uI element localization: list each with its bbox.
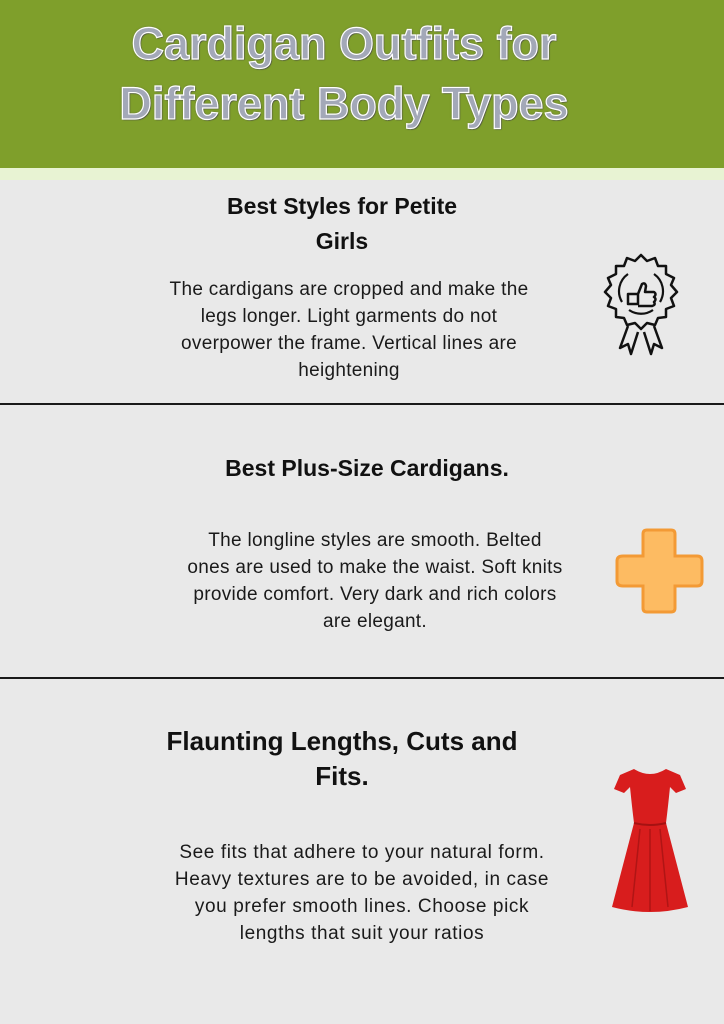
heading: plus-size: Best Plus-Size Cardigans. [225,455,509,481]
text: flaunting: See fits that adhere to your natural form. [179,842,545,863]
header band [0,0,724,168]
text: plus-size: The longline styles are smooth. Belted [208,530,542,551]
text: plus-size: provide comfort. Very dark and rich colors [193,584,557,605]
text: petite: The cardigans are cropped and make the [170,279,528,300]
icon: orange plus [616,528,704,614]
title [119,18,569,130]
icon: award badge [604,254,678,356]
heading: flaunting [166,726,517,791]
text: petite [170,279,528,381]
text: plus-size: ones are used to make the waist. Soft knits [187,557,563,578]
heading: flaunting: Fits. [315,761,369,791]
title: Different Body Types [119,78,569,129]
text: plus-size: are elegant. [323,611,427,632]
panel: flaunting [166,726,688,944]
title: Cardigan Outfits for [132,18,556,69]
panel: petite [170,193,678,381]
text: petite: heightening [298,360,400,381]
heading: flaunting: Flaunting Lengths, Cuts and [166,726,517,756]
text: flaunting: lengths that suit your ratios [240,923,484,944]
text: flaunting: Heavy textures are to be avoided, in case [175,869,549,890]
text: flaunting [175,842,549,944]
icon: red dress [612,769,688,912]
heading: petite: Best Styles for Petite [227,193,457,219]
text: petite: legs longer. Light garments do not [201,306,497,327]
heading: petite [227,193,457,254]
panel: plus-size [187,455,704,632]
text: plus-size [187,530,563,632]
light strip [0,168,724,180]
text: petite: overpower the frame. Vertical lines are [181,333,517,354]
heading: petite: Girls [316,228,368,254]
text: flaunting: you prefer smooth lines. Choose pick [195,896,529,917]
